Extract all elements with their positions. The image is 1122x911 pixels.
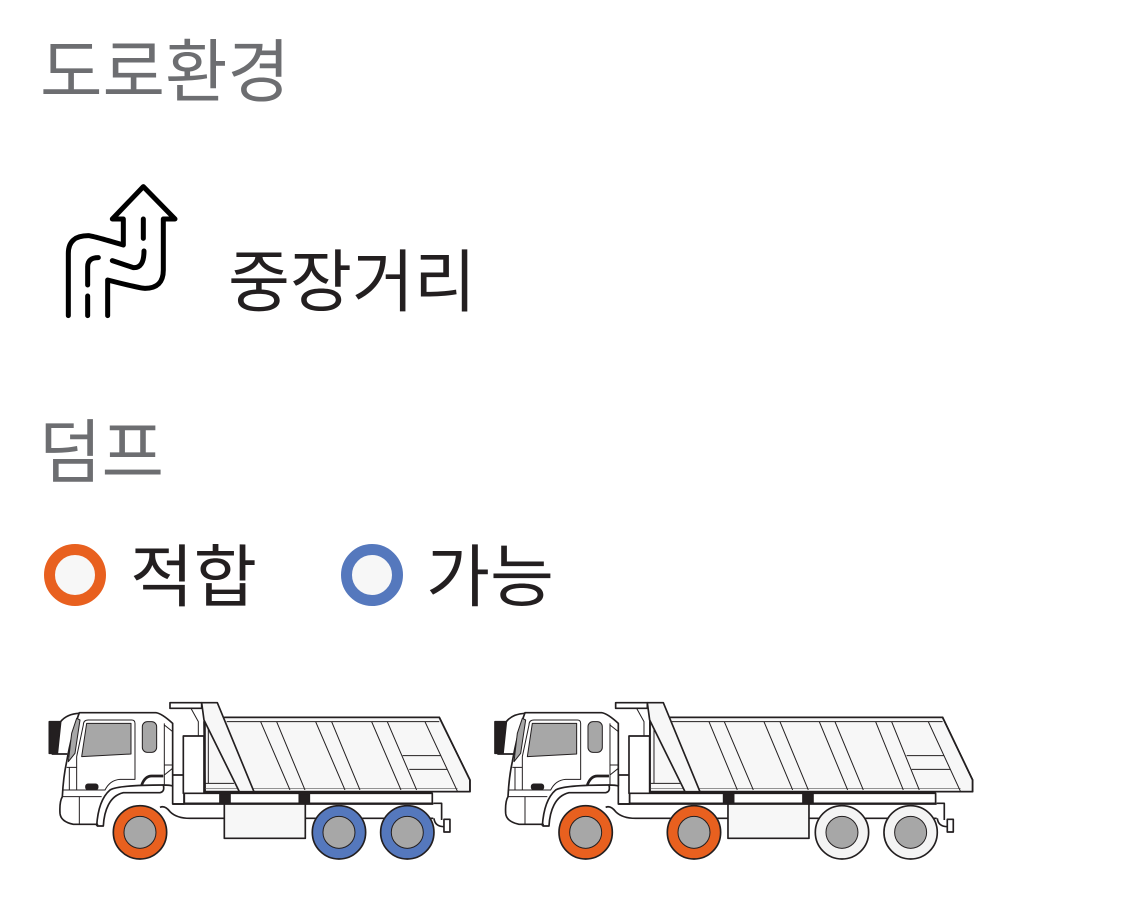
icon: winding road arrow bbox=[68, 187, 175, 316]
truck: front two axles suitable bbox=[495, 703, 973, 859]
heading: road environment: 도로환경 bbox=[40, 34, 290, 111]
legend: suitable bbox=[50, 540, 257, 616]
legend: suitable: 적합 bbox=[130, 540, 257, 616]
legend: possible bbox=[346, 540, 554, 616]
truck: front axle suitable, rear axles possible bbox=[49, 703, 470, 859]
heading: dump truck: 덤프 bbox=[39, 414, 164, 492]
legend: possible: 가능 bbox=[426, 540, 554, 616]
label: medium-long distance: 중장거리 bbox=[228, 245, 476, 321]
